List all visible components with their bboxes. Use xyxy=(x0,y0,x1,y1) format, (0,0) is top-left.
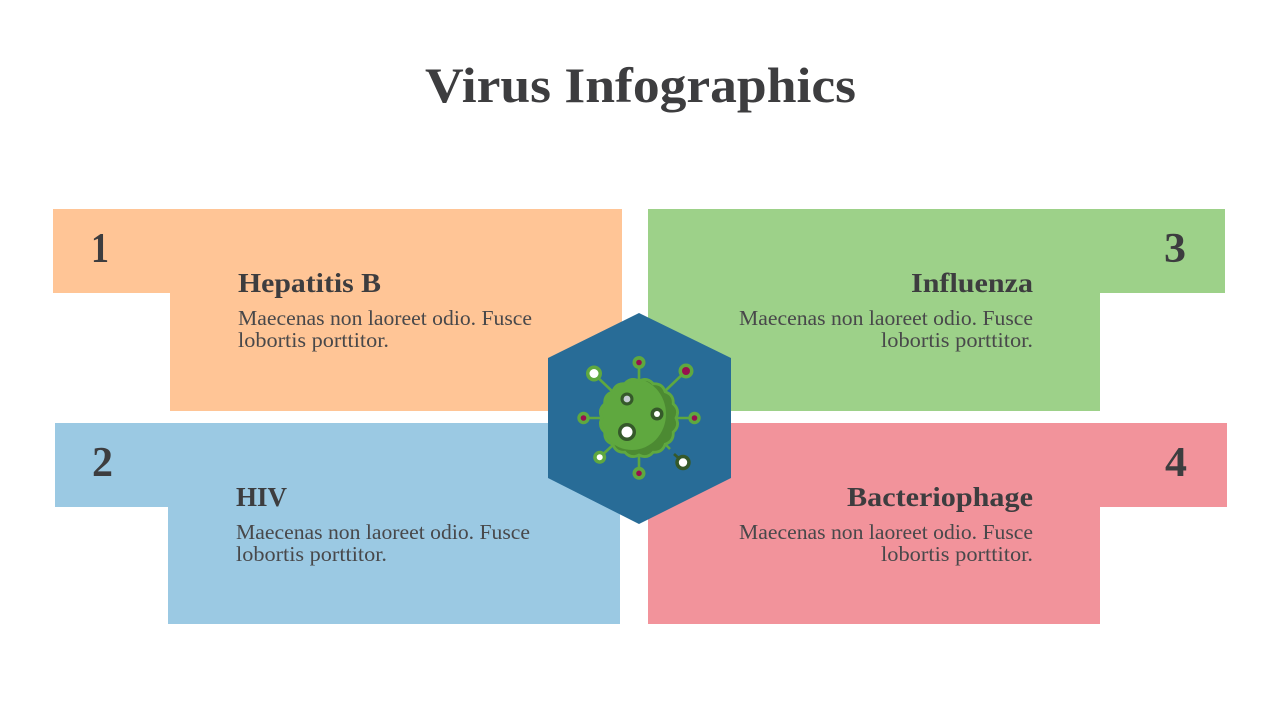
text block: Hepatitis B description: Maecenas non laoreet odio. Fusce xyxy=(238,306,532,330)
heading: Influenza: Influenza xyxy=(911,268,1034,298)
heading: Hepatitis B: Hepatitis B xyxy=(238,268,381,298)
panel: Influenza xyxy=(648,209,1225,411)
text block: Bacteriophage description xyxy=(739,520,1033,566)
text block: HIV description: lobortis porttitor. xyxy=(236,542,387,566)
heading: Bacteriophage: Bacteriophage xyxy=(847,482,1033,512)
panel background: blue xyxy=(55,423,620,624)
panel background: orange xyxy=(53,209,622,411)
title: Virus Infographics xyxy=(425,57,856,113)
hexagon badge xyxy=(548,313,731,524)
text block: Influenza description: Maecenas non laoreet odio. Fusce xyxy=(739,306,1033,330)
text block: HIV description: Maecenas non laoreet odio. Fusce xyxy=(236,520,530,544)
virus surface spots xyxy=(618,392,664,441)
text block: Bacteriophage description: Maecenas non laoreet odio. Fusce xyxy=(739,520,1033,544)
text block: Hepatitis B description: lobortis porttitor. xyxy=(238,328,389,352)
text block: Influenza description xyxy=(739,306,1033,352)
panel background: green xyxy=(648,209,1225,411)
text block: Bacteriophage description: lobortis porttitor. xyxy=(881,542,1033,566)
number 1: 1 xyxy=(91,226,109,272)
virus spike tips xyxy=(577,356,701,480)
number 4: 4 xyxy=(1165,440,1187,486)
panel: Bacteriophage xyxy=(648,423,1227,624)
panel background: pink xyxy=(648,423,1227,624)
number 2: 2 xyxy=(92,440,113,486)
heading: HIV: HIV xyxy=(236,482,287,512)
icon: virus xyxy=(577,356,701,480)
number 3: 3 xyxy=(1164,226,1186,272)
panel: Hepatitis B xyxy=(53,209,622,411)
text block: Influenza description: lobortis porttitor. xyxy=(881,328,1033,352)
text block: Hepatitis B description xyxy=(238,306,532,352)
panel: HIV xyxy=(55,423,620,624)
text block: HIV description xyxy=(236,520,530,566)
